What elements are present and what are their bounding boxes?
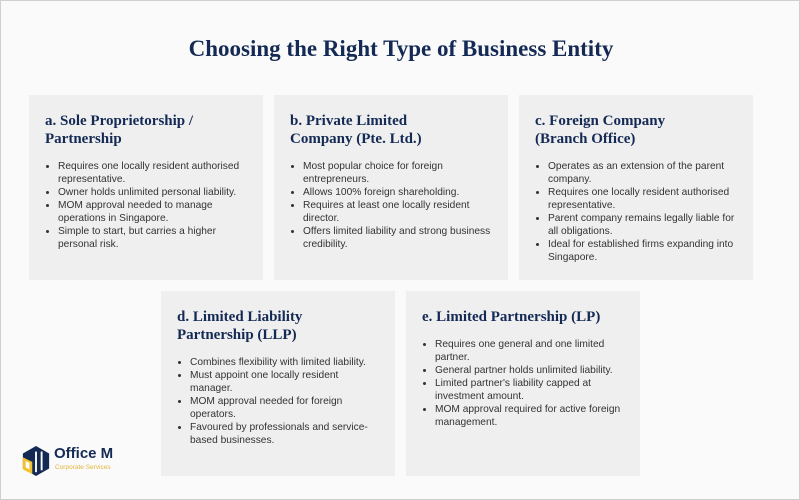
panel: LLP: Combines flexibility with limited liability.: [190, 357, 366, 368]
panel: LP: [406, 291, 640, 476]
panel: sole proprietorship: MOM approval needed to manage operations in Singapore.: [58, 200, 213, 224]
panel: sole proprietorship: [29, 95, 263, 280]
panel: sole proprietorship: Requires one locally resident authorised representative.: [58, 161, 239, 185]
panel: private limited: Requires at least one locally resident director.: [303, 200, 470, 224]
panel: foreign company: c. Foreign Company (Branch Office): [535, 113, 665, 147]
panel: LLP: Must appoint one locally resident manager.: [190, 370, 338, 394]
panel: foreign company: Requires one locally resident authorised representative.: [548, 187, 729, 211]
panel: LP: General partner holds unlimited liability.: [435, 365, 613, 376]
panel: foreign company: [519, 95, 753, 280]
logo: Office M: [54, 445, 113, 462]
panel: private limited: Offers limited liability and strong business credibility.: [303, 226, 490, 250]
panel: LLP: [161, 291, 395, 476]
panel: private limited: b. Private Limited Company (Pte. Ltd.): [290, 113, 422, 147]
panel: LLP: Favoured by professionals and service-based businesses.: [190, 422, 368, 446]
panel: private limited: Allows 100% foreign shareholding.: [303, 187, 459, 198]
panel: LLP: MOM approval needed for foreign operators.: [190, 396, 342, 420]
logo: Corporate Services: [55, 464, 111, 471]
title: Choosing the Right Type of Business Entity: [189, 36, 613, 61]
panel: foreign company: Parent company remains legally liable for all obligations.: [548, 213, 734, 237]
panel: sole proprietorship: Simple to start, but carries a higher personal risk.: [58, 226, 216, 250]
panel: LP: Requires one general and one limited partner.: [435, 339, 604, 363]
panel: sole proprietorship: Owner holds unlimited personal liability.: [58, 187, 236, 198]
panel: foreign company: Ideal for established firms expanding into Singapore.: [548, 239, 733, 263]
panel: LP: e. Limited Partnership (LP): [422, 309, 600, 325]
panel: foreign company: Operates as an extension of the parent company.: [548, 161, 724, 185]
panel: LP: MOM approval required for active foreign management.: [435, 404, 620, 428]
panel: LP: Limited partner's liability capped at investment amount.: [435, 378, 591, 402]
panel: private limited: Most popular choice for foreign entrepreneurs.: [303, 161, 443, 185]
panel: LLP: d. Limited Liability Partnership (LLP): [177, 309, 302, 343]
panel: sole proprietorship: a. Sole Proprietorship / Partnership: [45, 113, 193, 147]
logo: [22, 445, 113, 476]
panel: private limited: [274, 95, 508, 280]
